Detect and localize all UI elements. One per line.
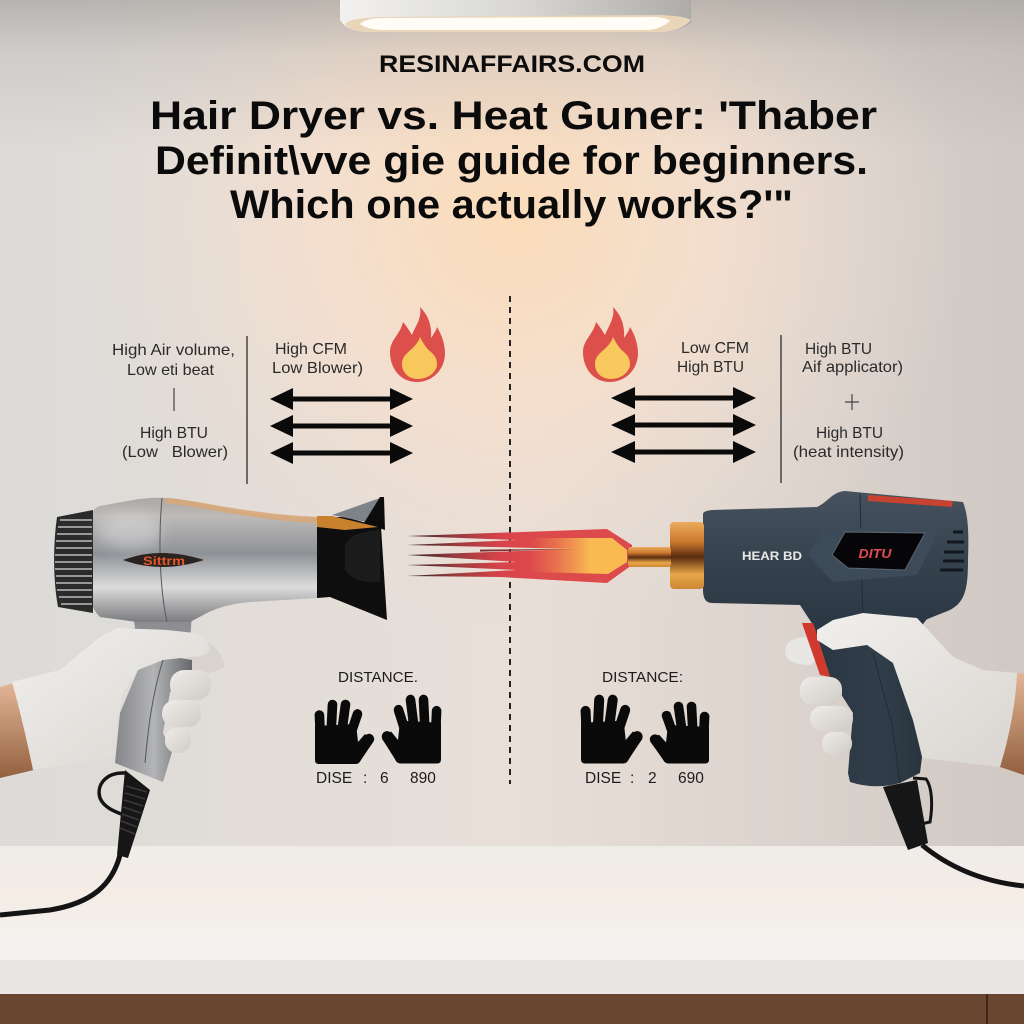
left glove wrap behind handle (185, 635, 225, 673)
right comparison labels: High BTU (805, 341, 872, 358)
right gloved hand and arm (800, 613, 1024, 775)
right dise value: DISE (585, 770, 621, 787)
left distance label: DISTANCE. (338, 670, 418, 686)
hair dryer (54, 497, 387, 640)
right double arrows (611, 387, 756, 463)
left comparison labels: High Air volume, (112, 342, 235, 359)
left glove (12, 628, 210, 770)
dryer stem (133, 615, 192, 640)
gun handle (800, 600, 930, 786)
gun label: HEAR BD (742, 551, 802, 563)
heat gun cord (913, 778, 1024, 886)
left dise value: 6 (380, 770, 389, 787)
dryer strain relief (117, 770, 150, 858)
right dise value: 690 (678, 770, 704, 787)
right comparison labels: High BTU (677, 359, 744, 376)
site name: RESINAFFAIRS.COM (379, 51, 645, 78)
left flame icon (390, 307, 445, 382)
left gloved hand and arm (0, 628, 211, 778)
right comparison labels: (heat intensity) (793, 444, 904, 461)
heat blast from heat gun (407, 529, 632, 583)
gun cord boot (883, 780, 928, 850)
gun copper collar (670, 522, 704, 589)
left comparison labels: High CFM (275, 341, 347, 358)
hair dryer cord (0, 773, 125, 915)
right flame icon (583, 307, 638, 382)
right comparison labels: Low CFM (681, 340, 749, 357)
dryer grille (54, 510, 93, 613)
dryer back grey shadow (92, 628, 135, 650)
left fingers (162, 670, 211, 753)
gun vents (940, 532, 964, 570)
right finger behind trigger (785, 637, 816, 665)
title: Hair Dryer vs. Heat Guner: 'Thaber (150, 94, 877, 138)
dryer body (93, 498, 318, 622)
left comparison labels: High BTU (140, 425, 208, 442)
left comparison labels: (Low Blower) (122, 444, 228, 461)
left double arrows (270, 388, 413, 464)
gun red stripe (868, 495, 953, 507)
left dise value: DISE (316, 770, 352, 787)
gun body (703, 491, 968, 625)
dryer display badge: Sittrm (143, 554, 185, 568)
gun display panel (808, 523, 943, 582)
centre dashed divider (509, 296, 511, 784)
right dise value: : (630, 770, 634, 787)
left dise value: 890 (410, 770, 436, 787)
right glove (817, 613, 1017, 767)
right hand icons (581, 700, 709, 763)
right comparison labels (677, 335, 904, 483)
right distance label: DISTANCE: (602, 670, 683, 686)
title: Which one actually works?'" (230, 183, 793, 227)
title (150, 94, 877, 227)
gun red trigger (802, 623, 830, 677)
right dise value: 2 (648, 770, 657, 787)
left hand icons (315, 700, 441, 764)
right forearm (1000, 673, 1024, 775)
ceiling lamp (340, 0, 692, 32)
left comparison labels: Low eti beat (127, 362, 215, 379)
dryer handle (115, 655, 192, 782)
title: Definit\vve gie guide for beginners. (155, 139, 868, 183)
gun copper tip (628, 547, 671, 567)
table (0, 846, 1024, 1024)
left comparison labels (112, 336, 363, 484)
right comparison labels: High BTU (816, 425, 883, 442)
dryer display badge (123, 553, 204, 568)
left forearm (0, 683, 34, 778)
heat gun (628, 491, 968, 850)
dryer nozzle (317, 497, 387, 620)
left dise value: : (363, 770, 367, 787)
right fingers (800, 677, 853, 755)
gun display panel: DITU (858, 546, 892, 561)
right comparison labels: Aif applicator) (802, 359, 903, 376)
left comparison labels: Low Blower) (272, 360, 363, 377)
